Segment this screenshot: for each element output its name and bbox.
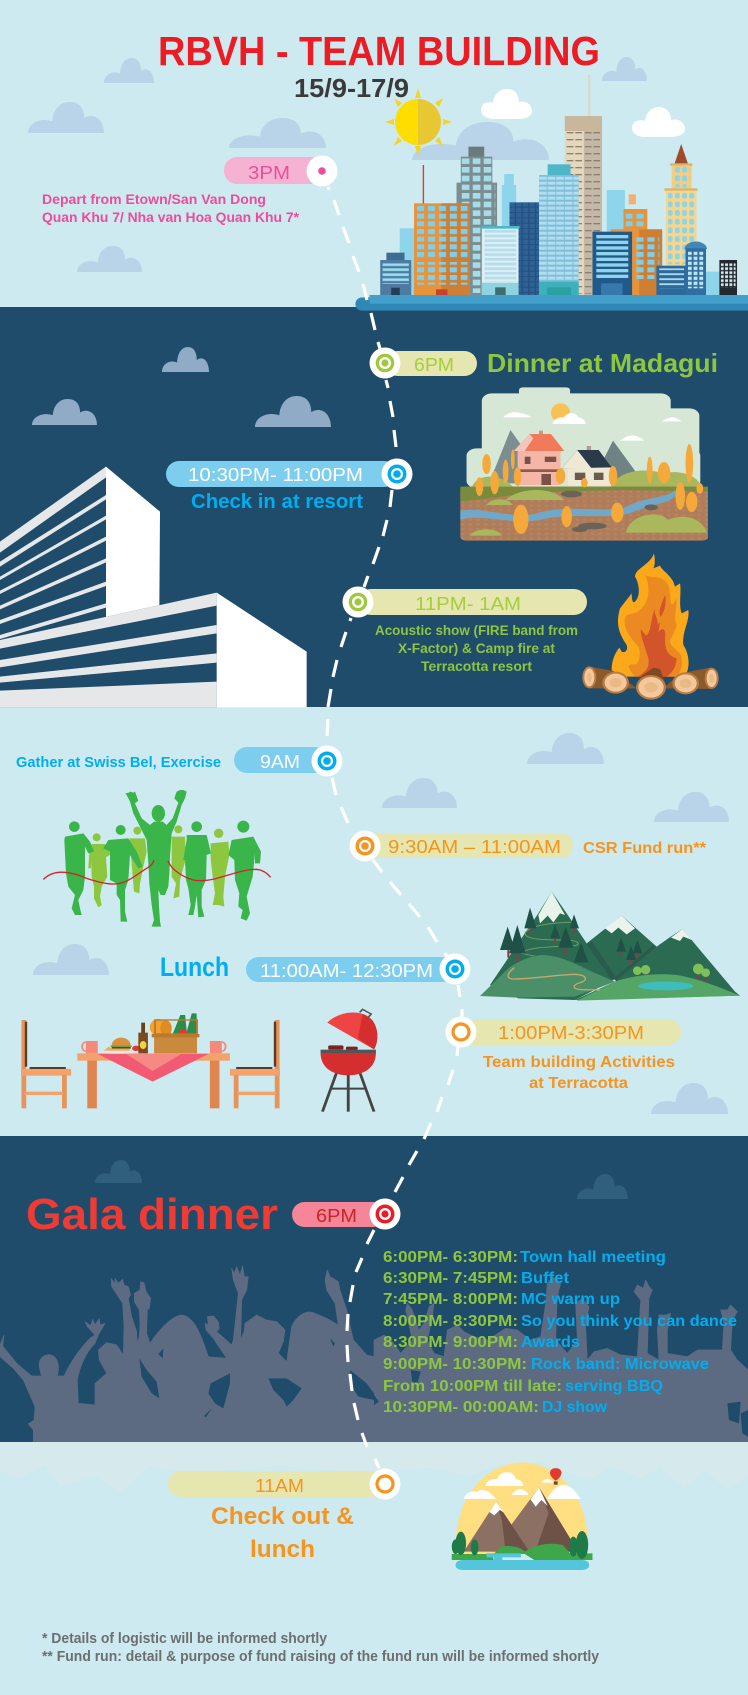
rocks <box>561 491 658 532</box>
schedule row: 9:00PM- 10:30PM: <box>383 1356 527 1373</box>
stop: check in <box>166 458 412 513</box>
schedule row: Buffet <box>521 1270 569 1287</box>
clouds <box>464 1472 581 1499</box>
time pill <box>224 157 324 184</box>
time pill <box>385 351 477 376</box>
time pill <box>168 1471 385 1497</box>
table <box>77 1053 230 1108</box>
cloud <box>28 102 104 133</box>
stop: acoustic show <box>342 586 587 674</box>
schedule row <box>383 1334 580 1351</box>
navy tower <box>509 202 539 295</box>
stop: gala dinner <box>26 1190 400 1239</box>
description: Terracotta resort <box>421 659 533 674</box>
schedule row: Rock band: Microwave <box>531 1356 709 1373</box>
schedule row <box>383 1291 620 1308</box>
schedule row <box>383 1378 663 1395</box>
cloud <box>33 944 109 975</box>
cloud <box>229 118 326 148</box>
illustration: camp fire <box>582 553 719 700</box>
front hills <box>480 955 615 998</box>
mountains <box>489 430 539 483</box>
dark blue block <box>592 232 632 295</box>
small clouds <box>503 412 681 441</box>
stop: 9AM gather <box>16 746 342 776</box>
white cloud <box>632 107 685 137</box>
trail <box>508 968 600 990</box>
blue block right <box>656 242 707 295</box>
orange block right <box>611 194 662 295</box>
description: Depart from Etown/San Van Dong <box>42 192 266 207</box>
description <box>483 1054 675 1092</box>
orange trees <box>476 444 703 534</box>
time label: 1:00PM-3:30PM <box>498 1023 644 1043</box>
date: 15/9-17/9 <box>294 73 409 103</box>
illustration: barbecue grill <box>321 1009 377 1112</box>
node <box>350 830 380 862</box>
panel: night band upper <box>0 307 748 707</box>
upper trail <box>522 922 578 957</box>
small left block <box>380 253 411 295</box>
blue tower <box>539 164 579 295</box>
description <box>42 192 300 225</box>
node <box>446 1016 476 1048</box>
burger on plate <box>100 1038 140 1054</box>
sunny dome <box>456 1463 588 1553</box>
heading: Dinner at Madagui <box>487 348 718 378</box>
cloud <box>104 58 154 83</box>
log ends <box>582 666 719 700</box>
stop: 3PM departure <box>42 156 338 225</box>
node <box>382 458 412 490</box>
description: Quan Khu 7/ Nha van Hoa Quan Khu 7* <box>42 210 300 225</box>
pine trees <box>500 908 642 962</box>
back mountains <box>490 892 740 1000</box>
time pill <box>292 1202 385 1227</box>
schedule row: Awards <box>521 1334 580 1351</box>
description: Team building Activities <box>483 1054 675 1071</box>
mugs <box>82 1041 226 1053</box>
cloud <box>255 396 331 427</box>
front building <box>0 593 307 707</box>
timeline: dashed route line <box>327 187 462 1468</box>
cloud <box>602 57 647 81</box>
footnote one: * Details of logistic will be informed shortly <box>42 1631 327 1647</box>
schedule row: From 10:00PM till late: <box>383 1378 562 1395</box>
cream tower <box>665 144 697 267</box>
back runners <box>88 825 229 907</box>
rear building <box>0 467 160 639</box>
heading: Gala dinner <box>26 1190 278 1239</box>
time label: 10:30PM- 11:00PM <box>188 465 363 485</box>
description: Check out & <box>211 1503 354 1530</box>
pink house <box>514 431 564 485</box>
right chair <box>230 1020 280 1108</box>
bushes <box>472 470 701 487</box>
green bushes <box>470 490 707 536</box>
time label: 11AM <box>255 1476 304 1496</box>
tablecloth <box>98 1054 208 1082</box>
orange tower <box>414 165 470 295</box>
cloud <box>162 347 209 372</box>
time label: 6PM <box>414 355 454 375</box>
time pill <box>246 957 455 982</box>
back logs <box>590 667 710 689</box>
node <box>370 1468 400 1500</box>
node <box>370 1198 400 1230</box>
schedule row <box>383 1356 709 1373</box>
schedule row <box>383 1399 608 1416</box>
clouds: sky group <box>28 57 647 272</box>
bottle <box>138 1023 148 1053</box>
time pill <box>234 747 327 773</box>
beige tower <box>565 75 602 295</box>
pale sky <box>467 387 700 488</box>
node <box>370 348 400 378</box>
illustration: crowd silhouette <box>0 1266 748 1442</box>
heading: Lunch <box>160 952 229 982</box>
lake <box>638 982 693 990</box>
time pill <box>365 833 573 858</box>
river <box>456 1553 589 1570</box>
description: at Terracotta <box>529 1075 628 1092</box>
node <box>342 586 374 618</box>
time label: 3PM <box>248 163 290 183</box>
stop: lunch <box>160 952 470 984</box>
icon: sun <box>385 88 452 156</box>
schedule row: 8:30PM- 9:00PM: <box>383 1334 518 1351</box>
description: lunch <box>250 1536 315 1563</box>
description: Acoustic show (FIRE band from <box>375 623 578 638</box>
time label: 11PM- 1AM <box>415 594 521 614</box>
schedule row: 6:00PM- 6:30PM: <box>383 1249 518 1266</box>
finish ribbon <box>43 860 271 884</box>
time label: 6PM <box>316 1206 357 1226</box>
grey tower <box>457 147 497 295</box>
illustration: runners <box>43 790 271 927</box>
legs <box>322 1073 374 1112</box>
time label: 11:00AM- 12:30PM <box>260 961 433 981</box>
clouds: upper night band <box>32 347 331 427</box>
cloud <box>577 1174 628 1199</box>
clouds: morning sky <box>33 733 729 1114</box>
schedule row: 10:30PM- 00:00AM: <box>383 1399 539 1416</box>
title: RBVH - TEAM BUILDING <box>158 28 600 74</box>
stop: 6PM dinner <box>370 348 718 378</box>
faded crowd below gala band <box>0 1442 748 1492</box>
description: CSR Fund run** <box>583 840 707 857</box>
round trees <box>633 964 710 977</box>
flames <box>612 553 689 677</box>
time label: 9:30AM – 11:00AM <box>388 837 561 857</box>
black block <box>719 260 737 295</box>
schedule row <box>383 1249 666 1266</box>
ground <box>460 487 708 541</box>
schedule row: MC warm up <box>521 1291 620 1308</box>
gala schedule <box>383 1249 737 1416</box>
cloud <box>32 399 97 425</box>
node <box>440 954 470 984</box>
crowd right half <box>374 1277 748 1442</box>
lead runner arms raised <box>125 790 187 927</box>
crowd left half <box>0 1266 375 1442</box>
schedule row: Town hall meeting <box>520 1249 666 1266</box>
cloud <box>95 1160 142 1183</box>
crowd gaps <box>139 1338 748 1437</box>
lid <box>327 1009 377 1049</box>
stop: check out <box>168 1468 400 1563</box>
description: Gather at Swiss Bel, Exercise <box>16 754 221 771</box>
cloud <box>412 122 549 160</box>
stop: CSR fund run <box>350 830 707 862</box>
time pill <box>358 589 587 615</box>
glass tower <box>481 226 519 295</box>
illustration: picnic table <box>21 1013 280 1108</box>
schedule row: 7:45PM- 8:00PM: <box>383 1291 518 1308</box>
time pill <box>166 461 397 487</box>
stop: team building activities <box>446 1016 681 1092</box>
cloud <box>651 1083 728 1114</box>
bowl <box>321 1053 376 1075</box>
schedule row: 8:00PM- 8:30PM: <box>383 1313 518 1330</box>
footnote two: ** Fund run: detail & purpose of fund raising of the fund run will be informed shortly <box>42 1649 599 1665</box>
cloud <box>382 778 457 808</box>
grate <box>321 1050 376 1053</box>
cream house <box>562 446 612 486</box>
white clouds <box>481 89 685 137</box>
illustration: mountain lake scene <box>452 1463 592 1570</box>
picnic basket <box>150 1013 199 1053</box>
time label: 9AM <box>260 752 300 772</box>
description: Check in at resort <box>191 491 363 513</box>
illustration: white hotel building <box>0 467 307 707</box>
description: X-Factor) & Camp fire at <box>398 641 556 656</box>
balloon <box>550 1468 561 1485</box>
illustration: green mountains <box>480 892 740 1001</box>
illustration: houses in the countryside <box>460 387 708 541</box>
cloud <box>527 733 604 764</box>
meat <box>346 1047 358 1050</box>
clouds: gala band <box>95 1160 628 1199</box>
trees <box>452 1531 588 1559</box>
schedule row: serving BBQ <box>565 1378 663 1395</box>
tree trunks <box>507 928 707 982</box>
meat <box>328 1045 343 1050</box>
schedule row <box>383 1313 737 1330</box>
schedule row: DJ show <box>542 1399 608 1416</box>
description <box>211 1503 354 1563</box>
schedule row: 6:30PM- 7:45PM: <box>383 1270 518 1287</box>
description <box>375 623 578 674</box>
cloud <box>77 246 142 272</box>
schedule row <box>383 1270 569 1287</box>
white cloud <box>481 89 532 119</box>
illustration: city skyline <box>355 75 748 311</box>
node <box>312 746 342 776</box>
platform <box>355 295 748 311</box>
green land <box>452 1544 592 1560</box>
footnotes <box>42 1631 599 1665</box>
cloud <box>654 792 729 822</box>
mountains <box>464 1487 578 1552</box>
front runners <box>64 790 261 927</box>
left chair <box>21 1020 71 1108</box>
time pill <box>461 1019 681 1045</box>
sun <box>551 403 570 422</box>
node <box>306 156 338 186</box>
schedule row: So you think you can dance <box>521 1313 737 1330</box>
panel: night band gala <box>0 1136 748 1442</box>
